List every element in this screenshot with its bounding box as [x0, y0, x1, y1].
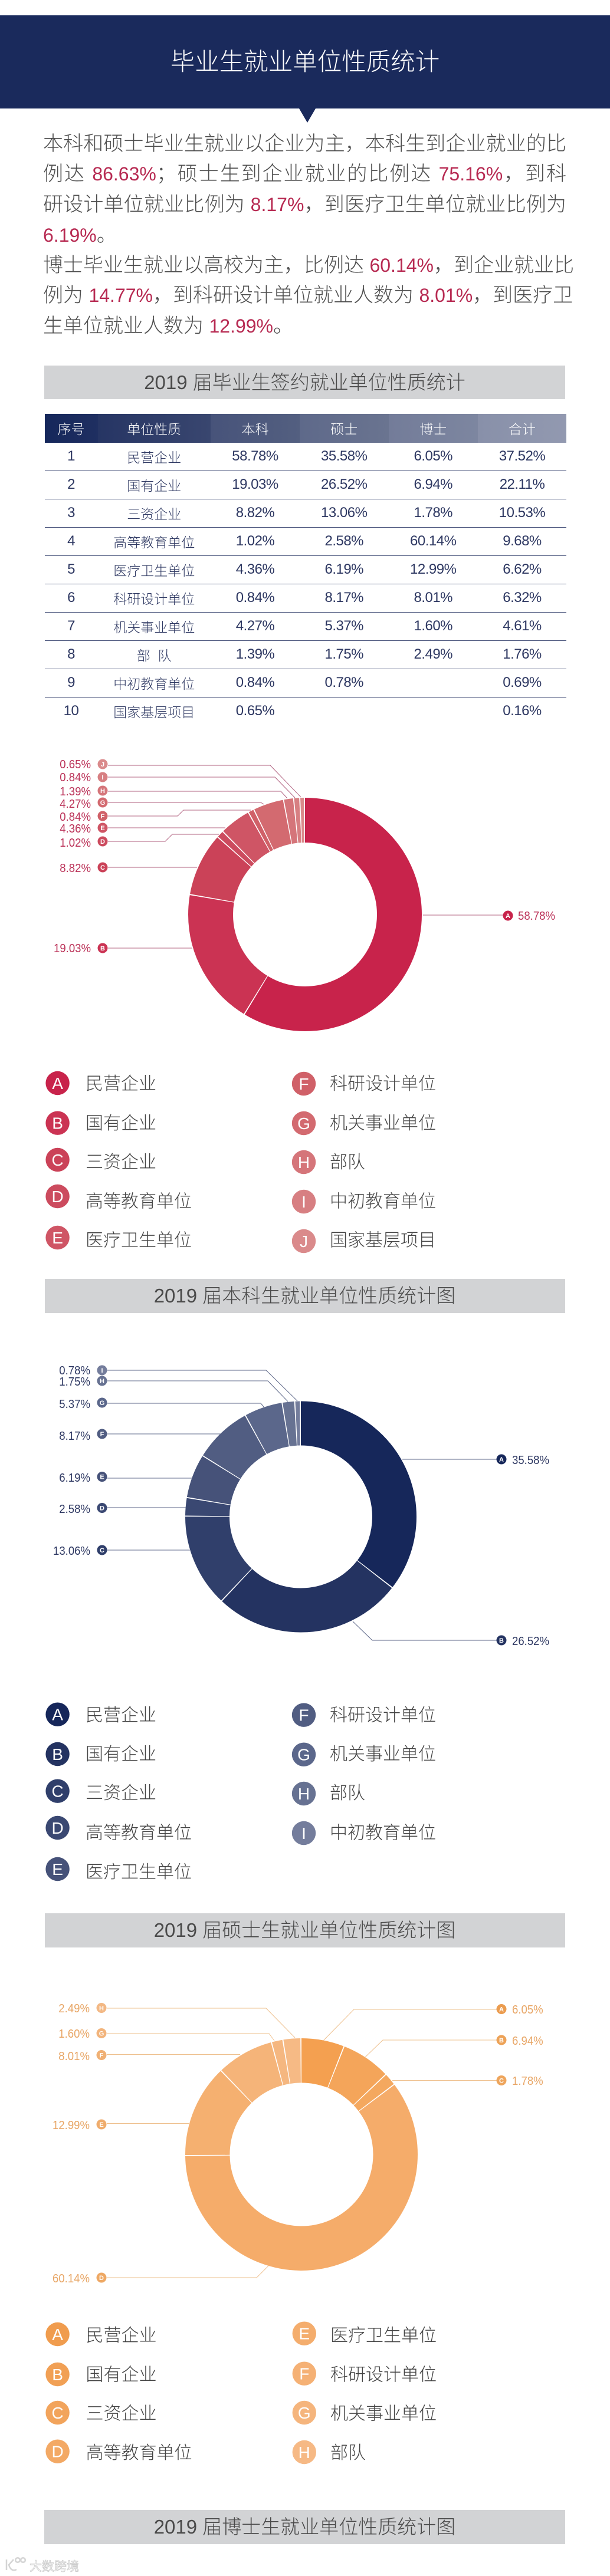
legend A: A [52, 1706, 63, 1724]
legend H: H [298, 1153, 310, 1172]
legend B: 国有企业 [86, 2366, 157, 2385]
intro text block: 博士毕业生就业以高校为主，比例达 60.14%，到企业就业比 [43, 254, 574, 277]
legend I: I [301, 1824, 306, 1843]
title banner [0, 15, 610, 123]
intro text block: 6.19%。 [43, 224, 117, 246]
row 8: 2.49% [414, 646, 452, 662]
legend J: 国家基层项目 [330, 1231, 436, 1251]
legend C: 三资企业 [86, 1784, 156, 1803]
legend C: C [51, 1151, 64, 1169]
legend D [45, 1816, 192, 1843]
legend H [292, 1782, 365, 1805]
leader lines [108, 765, 504, 948]
legend I [292, 1821, 436, 1845]
legend: master [45, 2322, 437, 2465]
row 1: 1 [67, 448, 75, 464]
row 3: 3 [67, 505, 75, 521]
label J [60, 758, 107, 771]
row 4: 2.58% [324, 533, 363, 549]
watermark logo [6, 2558, 25, 2570]
legend B: B [52, 1745, 63, 1764]
legend A [45, 2322, 157, 2346]
legend A: A [52, 2325, 63, 2344]
section heading: undergraduate [45, 1279, 565, 1313]
row 2: 6.94% [414, 476, 452, 492]
row 9: 9 [67, 675, 75, 690]
label J: J [101, 761, 104, 768]
section heading: signing statistics: 2019 届毕业生签约就业单位性质统计 [144, 371, 465, 393]
row 6: 科研设计单位 [113, 591, 195, 607]
legend F: 科研设计单位 [330, 1706, 436, 1725]
ring segments [208, 1423, 394, 1610]
label A [497, 1454, 549, 1467]
legend E: E [52, 1229, 63, 1247]
legend E [293, 2322, 437, 2345]
legend B [45, 2363, 157, 2386]
row 5: 6.62% [503, 561, 542, 577]
leader lines [107, 1370, 497, 1640]
label A: A [499, 1456, 504, 1463]
label F [60, 811, 107, 824]
legend B: B [52, 1114, 63, 1133]
label D: D [100, 838, 105, 845]
label F [59, 1429, 107, 1443]
label G: G [99, 2031, 104, 2038]
table header [45, 414, 566, 720]
ring segments [211, 820, 399, 1009]
row 6: 0.84% [236, 590, 274, 606]
label F [58, 2050, 106, 2063]
label D: 1.02% [60, 837, 91, 850]
legend G: G [297, 1746, 310, 1764]
label B: 6.94% [512, 2035, 543, 2048]
banner pointer [299, 108, 316, 123]
legend A [45, 1071, 156, 1095]
label G: G [100, 800, 105, 807]
row 2: 26.52% [321, 476, 367, 492]
table: employer type statistics [45, 414, 566, 720]
legend H: H [299, 2443, 310, 2462]
label H: H [100, 788, 105, 795]
label G: 5.37% [59, 1398, 90, 1411]
label C: C [100, 1547, 104, 1554]
row 1: 民营企业 [127, 450, 181, 465]
row 6: 8.17% [324, 590, 363, 606]
legend D [45, 1185, 192, 1212]
legend D: 高等教育单位 [86, 1192, 192, 1212]
row 8: 1.39% [236, 646, 274, 662]
row 9: 中初教育单位 [113, 676, 195, 692]
label E: 4.36% [60, 823, 91, 835]
label F: 0.84% [60, 811, 91, 824]
label E: E [100, 1474, 104, 1481]
banner background [0, 15, 610, 108]
legend E: E [52, 1860, 63, 1878]
leader lines [107, 2008, 497, 2278]
row 3: 1.78% [414, 505, 452, 521]
label B: B [499, 1637, 504, 1644]
label C: C [100, 864, 105, 871]
label G [58, 2028, 106, 2041]
row 1 [67, 448, 545, 465]
legend F [293, 2362, 437, 2386]
label B: 26.52% [512, 1635, 549, 1648]
row 5: 5 [67, 561, 75, 577]
legend E: 医疗卫生单位 [330, 2326, 437, 2345]
row 8: 部 队 [137, 648, 172, 663]
legend B: B [52, 2366, 63, 2384]
legend: undergraduate [45, 1703, 436, 1882]
intro text block: 例为 14.77%，到科研设计单位就业人数为 8.01%，到医疗卫 [43, 284, 573, 307]
legend G [292, 1743, 436, 1766]
legend C: C [51, 1782, 64, 1801]
label I: I [101, 1367, 103, 1374]
legend F: F [299, 2365, 309, 2383]
label I: I [101, 774, 104, 781]
row 2: 国有企业 [127, 478, 181, 494]
legend: all graduates [45, 1071, 436, 1254]
donut chart: master [53, 2002, 543, 2285]
row 3 [67, 505, 545, 522]
row 1: 6.05% [414, 448, 452, 464]
row 1: 35.58% [321, 448, 367, 464]
row 4: 4 [67, 533, 75, 549]
label I: 0.78% [59, 1364, 90, 1377]
row 8 [67, 646, 542, 663]
intro text block: 生单位就业人数为 12.99%。 [43, 315, 293, 337]
row 7 [67, 618, 542, 635]
legend H [292, 1150, 365, 1174]
label F: F [100, 1431, 104, 1438]
legend D: 高等教育单位 [86, 1824, 192, 1843]
row 7: 4.61% [503, 618, 542, 634]
legend H [293, 2440, 366, 2464]
intro text block: 本科和硕士毕业生就业以企业为主，本科生到企业就业的比 [43, 133, 566, 155]
label B [497, 2035, 543, 2048]
label C: 13.06% [53, 1545, 90, 1558]
label G [59, 1397, 107, 1411]
row 1: 37.52% [499, 448, 545, 464]
label A: 35.58% [512, 1454, 549, 1467]
label C: C [499, 2078, 504, 2085]
label A: 58.78% [518, 910, 555, 923]
row 9: 0.84% [236, 675, 274, 690]
row 5: 12.99% [410, 561, 456, 577]
legend G: G [298, 2404, 311, 2422]
row 7: 7 [67, 618, 75, 634]
row 8: 1.75% [324, 646, 363, 662]
row 9: 0.78% [324, 675, 363, 690]
section heading: master: 2019 届硕士生就业单位性质统计图 [154, 1919, 455, 1941]
legend G [293, 2401, 437, 2424]
legend E [45, 1857, 192, 1882]
legend F: F [299, 1075, 309, 1093]
legend G: 机关事业单位 [330, 1114, 436, 1133]
label A: A [499, 2006, 504, 2013]
row 4: 高等教育单位 [113, 535, 195, 550]
donut chart: undergraduate [53, 1364, 549, 1648]
legend A [45, 1703, 156, 1726]
legend D: D [51, 2443, 64, 2461]
section heading: doctoral: 2019 届博士生就业单位性质统计图 [154, 2516, 455, 2538]
label I [59, 1364, 107, 1377]
row 6: 8.01% [414, 590, 452, 606]
section heading: doctoral [44, 2510, 565, 2544]
legend C: C [51, 2404, 64, 2422]
legend H: 部队 [330, 1784, 365, 1803]
label D [59, 1503, 107, 1516]
legend D: D [51, 1187, 64, 1206]
table header: 博士 [419, 422, 447, 437]
legend D: 高等教育单位 [86, 2443, 192, 2463]
legend I: 中初教育单位 [330, 1824, 436, 1843]
row 8: 8 [67, 646, 75, 662]
label B: 19.03% [54, 942, 91, 955]
label F: F [101, 813, 105, 820]
legend G: 机关事业单位 [330, 2404, 437, 2424]
row 6 [67, 590, 542, 607]
watermark [6, 2557, 79, 2574]
row 6: 6.32% [503, 590, 542, 606]
table header: 合计 [509, 422, 536, 437]
section heading: signing statistics [44, 366, 565, 399]
label A: 6.05% [512, 2003, 543, 2016]
label F: F [100, 2052, 104, 2059]
row 3: 三资企业 [127, 506, 181, 522]
row 1: 58.78% [232, 448, 278, 464]
label G: G [100, 1400, 104, 1407]
row 4: 1.02% [236, 533, 274, 549]
row 7: 5.37% [324, 618, 363, 634]
section heading: master [45, 1913, 565, 1947]
row 7: 4.27% [236, 618, 274, 634]
legend D [45, 2440, 192, 2463]
label D [60, 836, 107, 850]
legend B [45, 1111, 156, 1135]
row 10: 0.16% [503, 703, 542, 719]
label B [497, 1635, 549, 1648]
label A [503, 910, 555, 923]
row 7: 机关事业单位 [113, 620, 195, 635]
label B: B [499, 2037, 504, 2044]
row 3: 13.06% [321, 505, 367, 521]
label D: D [99, 2275, 104, 2282]
label F: 8.01% [58, 2050, 90, 2063]
label F: 8.17% [59, 1430, 90, 1443]
row 5: 6.19% [324, 561, 363, 577]
label G: 1.60% [58, 2028, 90, 2041]
legend H: H [298, 1785, 310, 1803]
label H: 1.75% [59, 1376, 90, 1389]
legend G: G [297, 1114, 310, 1133]
row 2: 2 [67, 476, 75, 492]
legend I: I [301, 1193, 306, 1211]
table header: 本科 [242, 422, 269, 437]
ring segments [208, 2061, 395, 2248]
row 3: 8.82% [236, 505, 274, 521]
row 3: 10.53% [499, 505, 545, 521]
row 4 [67, 533, 542, 550]
label D: 60.14% [53, 2272, 90, 2285]
legend F [292, 1703, 436, 1727]
legend J: J [300, 1232, 308, 1251]
legend F [292, 1072, 436, 1095]
legend I: 中初教育单位 [330, 1192, 436, 1212]
legend C [45, 1779, 156, 1803]
label G: 4.27% [60, 798, 91, 811]
label E: 12.99% [53, 2119, 90, 2132]
row 5: 4.36% [236, 561, 274, 577]
intro text block [43, 133, 574, 337]
legend E: E [299, 2325, 310, 2343]
label H [58, 2002, 106, 2015]
legend A: 民营企业 [86, 2326, 157, 2345]
row 9: 0.69% [503, 675, 542, 690]
intro text block: 研设计单位就业比例为 8.17%，到医疗卫生单位就业比例为 [43, 193, 566, 216]
legend F: F [299, 1706, 309, 1725]
legend B [45, 1742, 156, 1766]
label H: H [100, 1378, 104, 1385]
legend A: A [52, 1074, 63, 1093]
legend E [45, 1226, 192, 1251]
watermark text: 大数跨境 [29, 2560, 79, 2574]
table header: 硕士 [330, 422, 358, 437]
label J: 0.65% [60, 758, 91, 771]
label E [59, 1472, 107, 1485]
legend H: 部队 [330, 1153, 365, 1172]
row 9 [67, 675, 542, 692]
label I: 0.84% [60, 771, 91, 784]
row 2: 22.11% [500, 476, 545, 492]
label C [497, 2075, 543, 2088]
label H [60, 785, 107, 798]
legend E: 医疗卫生单位 [86, 1863, 192, 1882]
legend C [45, 1148, 156, 1172]
label A: A [506, 913, 510, 920]
legend A: 民营企业 [86, 1074, 156, 1094]
legend B: 国有企业 [86, 1114, 156, 1133]
label C: 8.82% [60, 862, 91, 875]
row 4: 9.68% [503, 533, 542, 549]
legend B: 国有企业 [86, 1745, 156, 1764]
legend C: 三资企业 [86, 1153, 156, 1172]
label I [60, 771, 107, 784]
legend C: 三资企业 [86, 2404, 157, 2424]
title: 毕业生就业单位性质统计 [170, 48, 440, 75]
legend C [45, 2401, 157, 2424]
row 8: 1.76% [503, 646, 542, 662]
label A [497, 2003, 543, 2016]
row 10: 10 [64, 703, 78, 719]
table header: 单位性质 [127, 422, 181, 437]
row 10: 0.65% [236, 703, 274, 719]
label E: E [100, 825, 105, 832]
legend J [292, 1229, 436, 1253]
section heading: undergraduate: 2019 届本科生就业单位性质统计图 [154, 1285, 455, 1307]
label B: B [100, 945, 105, 952]
legend F: 科研设计单位 [330, 1074, 436, 1094]
row 2 [67, 476, 545, 494]
intro text block: 例达 86.63%；硕士生到企业就业的比例达 75.16%，到科 [43, 163, 566, 185]
legend G: 机关事业单位 [330, 1745, 436, 1764]
label H: H [99, 2005, 104, 2012]
label E: 6.19% [59, 1472, 90, 1485]
label H: 2.49% [58, 2002, 90, 2015]
legend H: 部队 [330, 2443, 366, 2463]
row 6: 6 [67, 590, 75, 606]
row 7: 1.60% [414, 618, 452, 634]
legend D: D [51, 1819, 64, 1837]
label H [59, 1376, 107, 1389]
legend F: 科研设计单位 [330, 2366, 437, 2385]
label E: E [99, 2121, 104, 2128]
label D: D [100, 1505, 104, 1512]
legend G [292, 1111, 436, 1135]
legend E: 医疗卫生单位 [86, 1231, 192, 1251]
row 10 [64, 703, 542, 720]
label E [60, 823, 107, 835]
label C: 1.78% [512, 2075, 543, 2088]
row 5 [67, 561, 542, 578]
legend A: 民营企业 [86, 1706, 156, 1725]
row 10: 国家基层项目 [113, 705, 195, 720]
row 2: 19.03% [232, 476, 278, 492]
table header: 序号 [58, 422, 85, 437]
donut chart: all graduates [54, 758, 555, 1031]
label C [60, 862, 107, 875]
label H: 1.39% [60, 785, 91, 798]
row 5: 医疗卫生单位 [113, 563, 195, 578]
label D: 2.58% [59, 1503, 90, 1516]
row 4: 60.14% [410, 533, 456, 549]
legend I [292, 1190, 436, 1213]
label G [60, 797, 107, 811]
